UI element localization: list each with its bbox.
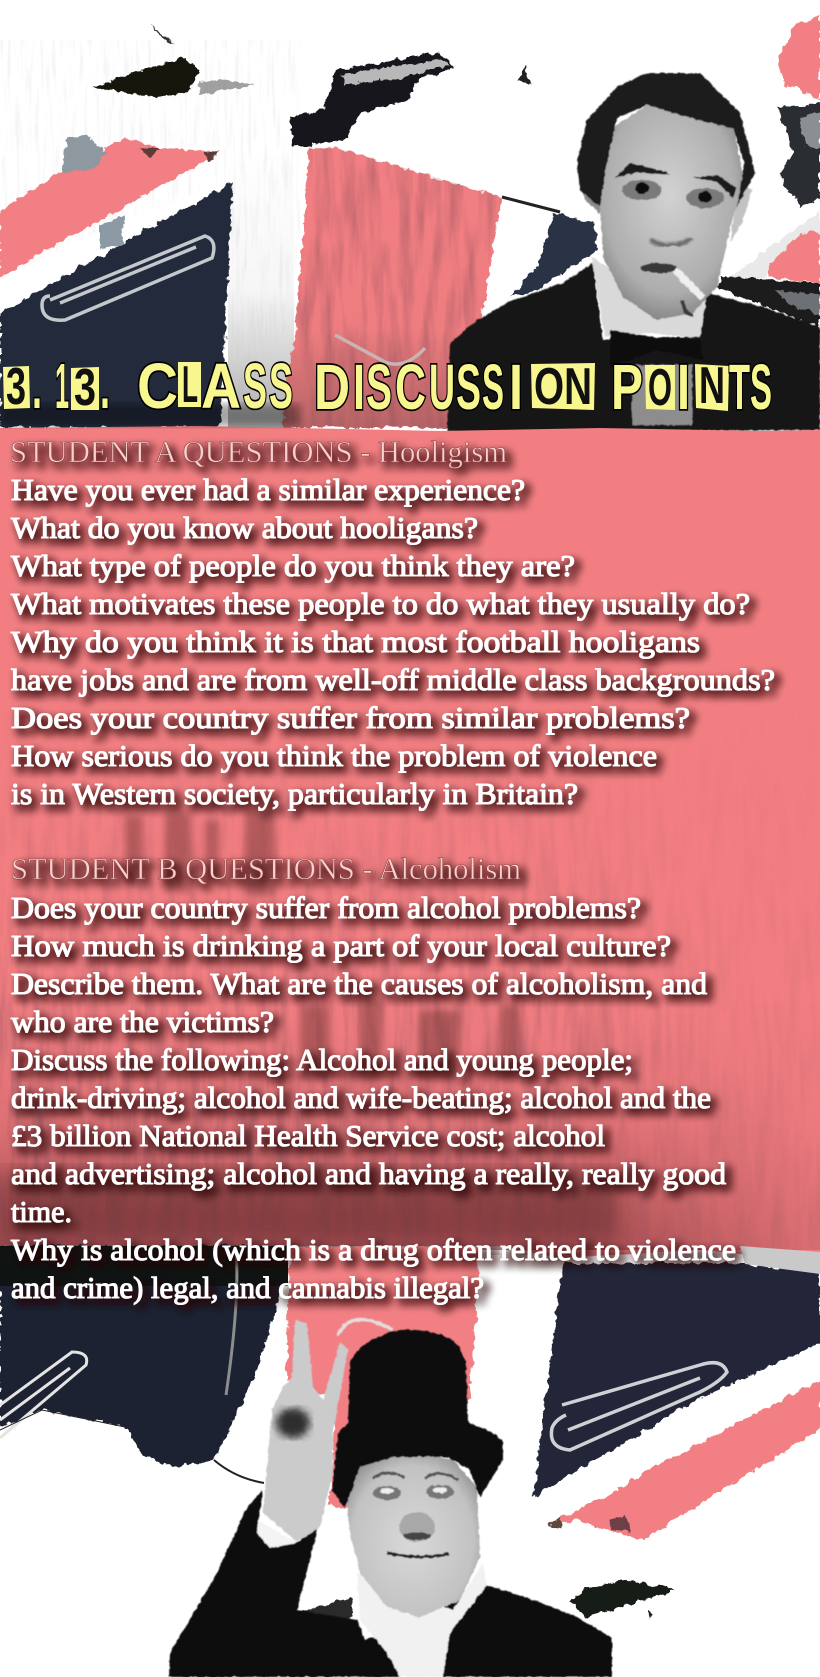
icon: safety pin, bottom left [0,1352,87,1438]
text block: student B questions: Describe them. What are the causes of alcoholism, and [11,966,708,1001]
title: ON [534,358,592,416]
text block: student A questions: How serious do you think the problem of violence [11,738,657,773]
icon: safety pin, bottom right [551,1363,727,1450]
title: A [201,350,241,422]
title: S [456,351,481,423]
title: 3 [6,358,26,416]
portrait: man in bow tie with cigarette [447,73,820,432]
portrait: man in top hat making a V sign [169,1320,612,1677]
text block: student B questions: and advertising; alcohol and having a really, really good [11,1156,727,1191]
title: O [648,359,672,417]
text block: student A questions: Does your country suffer from similar problems? [11,700,690,735]
title: S [366,351,392,423]
title [0,350,772,426]
title: C [137,350,178,422]
text block: student B questions [11,851,736,1305]
title: 3 [74,359,96,417]
title: . [100,350,110,422]
text block: student B questions: Discuss the following: Alcohol and young people; [11,1042,633,1077]
title: T [729,351,750,423]
heading: student A: STUDENT A QUESTIONS - Hooligism [10,434,507,469]
title: 1 [55,350,69,422]
text block: student B questions: who are the victims? [11,1004,274,1039]
title: L [182,356,198,414]
text block: student A questions: What motivates these people to do what they usually do? [11,586,750,621]
title: U [429,351,455,423]
title: P [611,351,643,423]
icon: safety pin, top left [42,236,214,320]
title: . [32,350,42,422]
text block: student B questions: Does your country suffer from alcohol problems? [11,890,641,925]
title: S [482,351,504,423]
title: S [750,351,772,423]
torn flag collage: top [0,15,820,430]
title: I [509,351,523,423]
title: C [395,351,426,423]
text block: student B questions: £3 billion National Health Service cost; alcohol [11,1118,605,1153]
title: I [677,351,690,423]
text block: student B questions: How much is drinking a part of your local culture? [11,928,671,963]
title: N [699,357,725,415]
text block: student A questions: Why do you think it is that most football hooligans [11,624,700,659]
text block: student A questions: is in Western society, particularly in Britain? [11,776,578,811]
panel: pink question background [0,426,820,1262]
text block: student B questions: and crime) legal, and cannabis illegal? [11,1270,484,1305]
text block: student B questions: Why is alcohol (which is a drug often related to violence [11,1232,736,1267]
title: I [353,351,365,423]
text block: student B questions: time. [11,1194,72,1229]
heading: student B: STUDENT B QUESTIONS - Alcoholism [11,851,521,886]
text block: student A questions: Have you ever had a similar experience? [11,472,525,507]
title: S [243,350,267,422]
text block: student A questions: What do you know about hooligans? [11,510,478,545]
torn flag collage: bottom [0,1246,820,1623]
text block: student A questions: have jobs and are from well-off middle class backgrounds? [11,662,775,697]
text block: student B questions: drink-driving; alcohol and wife-beating; alcohol and the [11,1080,711,1115]
text block: student A questions [10,434,775,811]
title: D [314,351,350,423]
text block: student A questions: What type of people do you think they are? [11,548,575,583]
title: S [269,350,293,422]
